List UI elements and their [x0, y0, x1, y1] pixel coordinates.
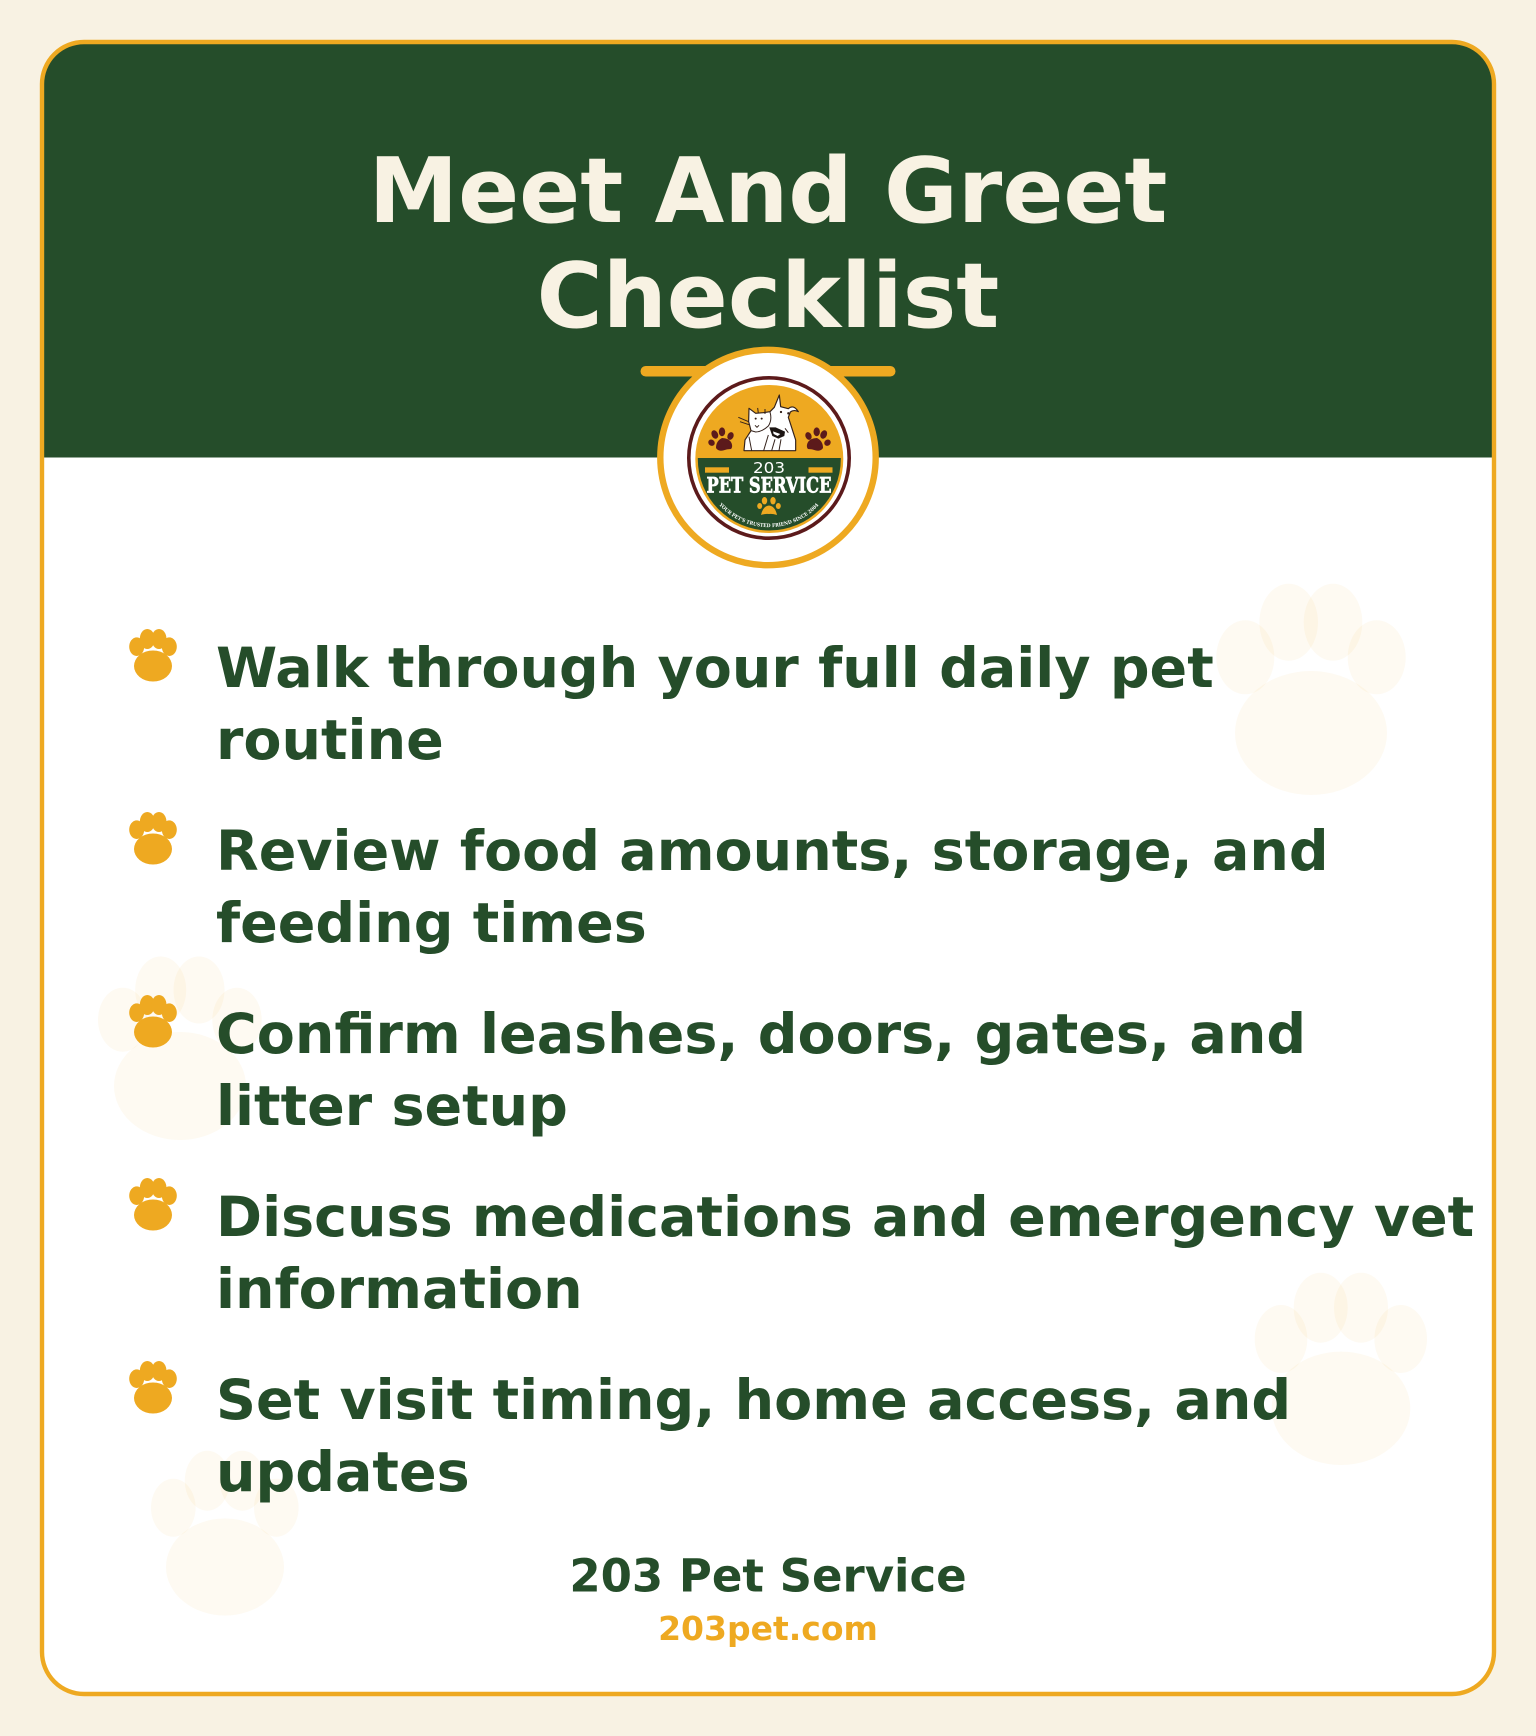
title [369, 139, 1167, 349]
footer website: 203pet.com [658, 1609, 878, 1648]
logo curved tagline [719, 505, 819, 527]
checklist item 2: feeding times [216, 891, 647, 956]
watermark paw: top right [1216, 584, 1406, 795]
checklist item 5 [216, 1368, 1291, 1505]
logo bar: right [808, 467, 832, 473]
logo paw: left [707, 427, 735, 451]
logo badge: YOUR PET'S TRUSTED FRIEND SINCE 2004 [720, 502, 819, 528]
bullet paw 1 [129, 629, 177, 682]
logo text: 203: 203 [753, 459, 785, 477]
title: Checklist [537, 244, 999, 349]
badge circle [660, 350, 876, 565]
title: Meet And Greet [369, 139, 1167, 244]
watermark paw: lower right [1255, 1273, 1427, 1465]
watermark paw: bottom left [151, 1451, 299, 1616]
cat and dog face details [738, 408, 788, 451]
checklist item 4 [216, 1185, 1474, 1322]
checklist item 1: routine [216, 708, 444, 773]
checklist item 5: Set visit timing, home access, and [216, 1368, 1291, 1433]
gold disc [695, 385, 843, 533]
bullet paw 4 [129, 1178, 177, 1230]
title underline bar [640, 366, 896, 376]
watermark paw: middle left [98, 956, 262, 1140]
logo badge [657, 346, 879, 568]
bullet paw 3 [129, 995, 177, 1048]
logo paw: right [804, 427, 832, 451]
checklist item 1: Walk through your full daily pet [216, 636, 1214, 701]
logo bar: left [705, 467, 729, 473]
bullet paw 2 [129, 812, 177, 864]
checklist item 1 [216, 636, 1214, 773]
checklist item 3: litter setup [216, 1074, 568, 1139]
checklist item 2: Review food amounts, storage, and [216, 819, 1329, 884]
checklist item 4: information [216, 1257, 583, 1322]
dog muzzle [769, 427, 785, 439]
checklist item 5: updates [216, 1440, 470, 1505]
panel: green header [42, 42, 1494, 458]
logo illustration: cat and dog [738, 395, 798, 451]
bullet paw 5 [129, 1361, 177, 1414]
logo text: pet service: PET SERVICE [706, 472, 832, 497]
maroon ring [689, 378, 849, 538]
checklist item 3 [216, 1002, 1306, 1139]
green lower banner [698, 458, 841, 530]
checklist item 3: Confirm leashes, doors, gates, and [216, 1002, 1306, 1067]
checklist item 4: Discuss medications and emergency vet [216, 1185, 1474, 1250]
logo paw: center [757, 497, 781, 515]
footer brand name: 203 Pet Service [569, 1550, 967, 1603]
checklist item 2 [216, 819, 1329, 956]
